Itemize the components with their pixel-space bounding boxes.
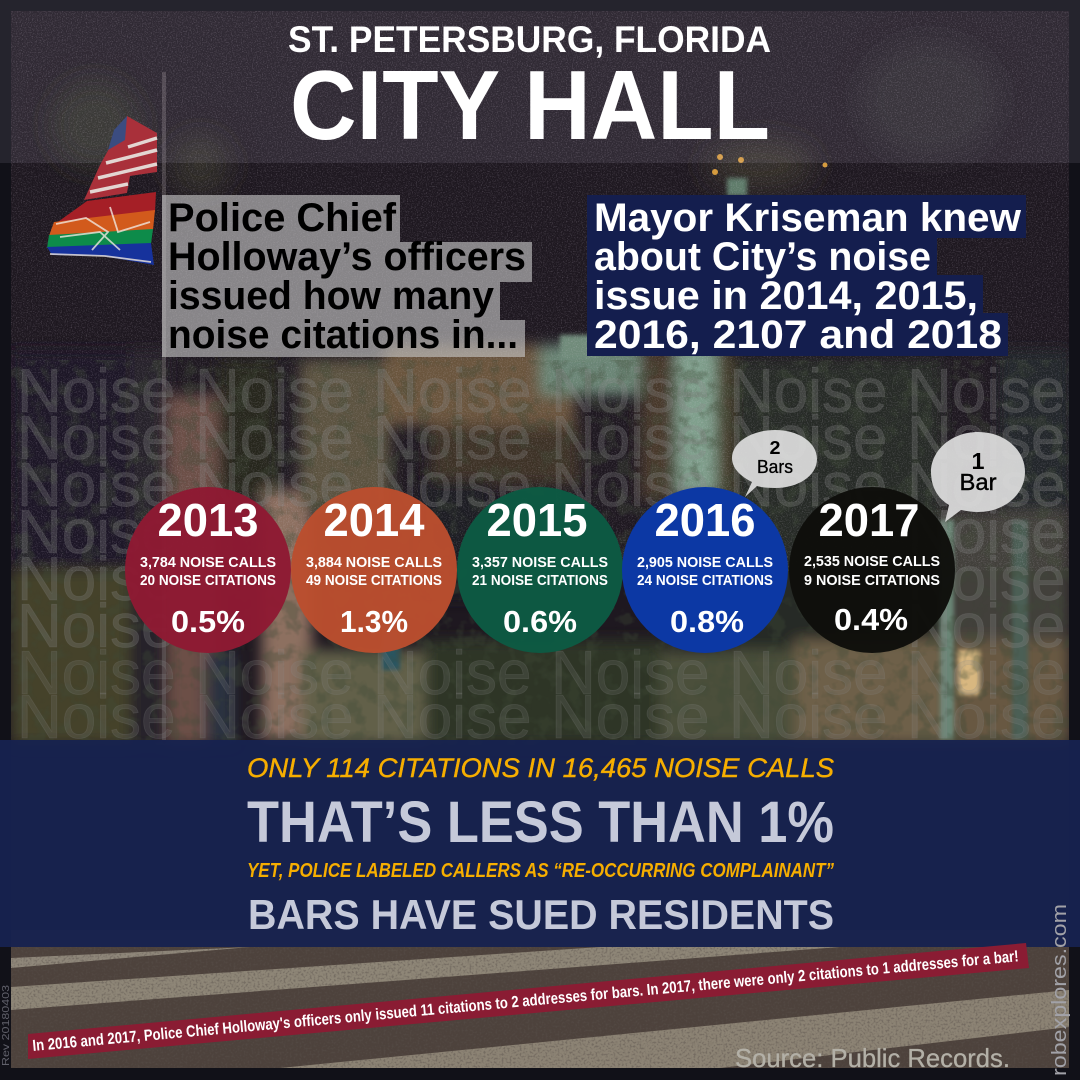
icon: American flag [84,116,157,200]
noise watermark: Noise [907,451,1066,520]
circle: 2014: 2014 [324,494,425,546]
circle: 2014: 3,884 NOISE CALLS [306,554,442,571]
circle: 2017: 9 NOISE CITATIONS [804,572,940,589]
callout: 2 bars: Bars [757,457,793,477]
noise watermark: Noise [195,357,354,426]
callout: 1 bar [931,432,1025,522]
circle: 2014 [291,487,457,653]
noise watermark: Noise [373,451,532,520]
noise watermark: Noise [551,357,710,426]
noise watermark: Noise [195,451,354,520]
noise watermark: Noise [907,498,1066,567]
noise watermark: Noise [907,357,1066,426]
noise watermark: Noise [551,683,710,752]
callout: 1 bar: 1 [972,448,985,474]
noise watermark: Noise [373,683,532,752]
noise watermark: Noise [907,592,1066,661]
noise watermark: Noise [195,639,354,708]
credit: robexplores.com: robexplores.com [1049,904,1071,1076]
callout: 1 bar: Bar [960,469,997,495]
source note: Source: Public Records. [735,1043,1010,1073]
circle: 2016: 2,905 NOISE CALLS [637,554,773,571]
callout: 2 bars: 2 [770,438,780,458]
street lights [712,154,828,175]
circle: 2015: 3,357 NOISE CALLS [472,554,608,571]
circle: 2015: 21 NOISE CITATIONS [472,572,608,589]
noise watermark: Noise [729,683,888,752]
panel: police chief question [162,195,532,357]
noise watermark: Noise [17,639,176,708]
title: ST. PETERSBURG, FLORIDA [288,19,771,60]
summary: bars sued residents: BARS HAVE SUED RESIDENTS [248,891,834,938]
title: CITY HALL [290,50,770,160]
noise watermark: Noise [551,451,710,520]
noise watermark: Noise [907,639,1066,708]
circle: 2015: 2015 [486,494,588,546]
noise watermark: Noise [907,683,1066,752]
noise watermark: Noise [17,357,176,426]
film grain [11,11,1069,571]
noise watermark: Noise [373,639,532,708]
noise watermark: Noise [17,683,176,752]
noise watermark: Noise [907,404,1066,473]
circle: 2013: 20 NOISE CITATIONS [140,572,276,589]
noise watermark: Noise [551,639,710,708]
summary: citations count: ONLY 114 CITATIONS IN 16,465 NOISE CALLS [247,753,834,783]
panel: summary band [0,740,1080,947]
panel: police chief question: noise citations in... [168,313,518,357]
panel: mayor statement: issue in 2014, 2015, [594,274,978,318]
noise watermark: Noise [729,357,888,426]
circle: 2014: 49 NOISE CITATIONS [306,572,442,589]
circle: 2016: 0.8% [670,604,744,639]
circle: 2017: 2,535 NOISE CALLS [804,553,940,570]
noise watermark: Noise [729,451,888,520]
noise watermark: Noise [907,545,1066,614]
circle: 2015: 0.6% [503,604,577,639]
circle: 2016: 24 NOISE CITATIONS [637,572,773,589]
circle: 2015 [457,487,623,653]
header tint band [0,0,1080,163]
noise watermark: Noise [729,639,888,708]
noise watermark: Noise [373,357,532,426]
summary: less than 1%: THAT’S LESS THAN 1% [247,790,834,855]
revision note: Rev 20180403 [1,984,12,1066]
noise watermark: Noise [17,498,176,567]
road with crosswalk stripes [11,947,1069,1068]
panel: police chief question: Police Chief [168,196,397,240]
circle: 2017: 0.4% [834,602,908,637]
noise watermark [17,357,1066,752]
circle: 2013: 2013 [158,494,258,546]
noise watermark: Noise [729,404,888,473]
noise watermark: Noise [373,404,532,473]
circle: 2016 [622,487,788,653]
noise watermark: Noise [551,404,710,473]
panel: mayor statement: Mayor Kriseman knew [594,196,1022,240]
circle: 2013 [125,487,291,653]
circle: 2017 [789,487,955,653]
panel: mayor statement: 2016, 2107 and 2018 [594,313,1002,357]
circle: 2017: 2017 [818,494,920,546]
noise watermark: Noise [17,592,176,661]
panel: police chief question: issued how many [168,274,495,318]
noise watermark: Noise [195,404,354,473]
panel: mayor statement: about City’s noise [594,235,931,279]
summary: callers labeled: YET, POLICE LABELED CALLERS AS “RE-OCCURRING COMPLAINANT” [247,860,834,882]
noise watermark: Noise [17,545,176,614]
circle: 2013: 0.5% [171,604,245,639]
circle: 2013: 3,784 NOISE CALLS [140,554,276,571]
flagpole [162,72,166,740]
tree mottling [11,360,1069,745]
callout: 2 bars [732,430,817,497]
circle: 2016: 2016 [654,494,756,546]
noise watermark: Noise [17,404,176,473]
noise watermark: Noise [195,683,354,752]
icon: St. Petersburg flag [47,192,156,265]
noise watermark: Noise [17,451,176,520]
circle: 2014: 1.3% [340,604,408,639]
panel: police chief question: Holloway’s officers [168,235,526,279]
panel: mayor statement [587,195,1026,357]
